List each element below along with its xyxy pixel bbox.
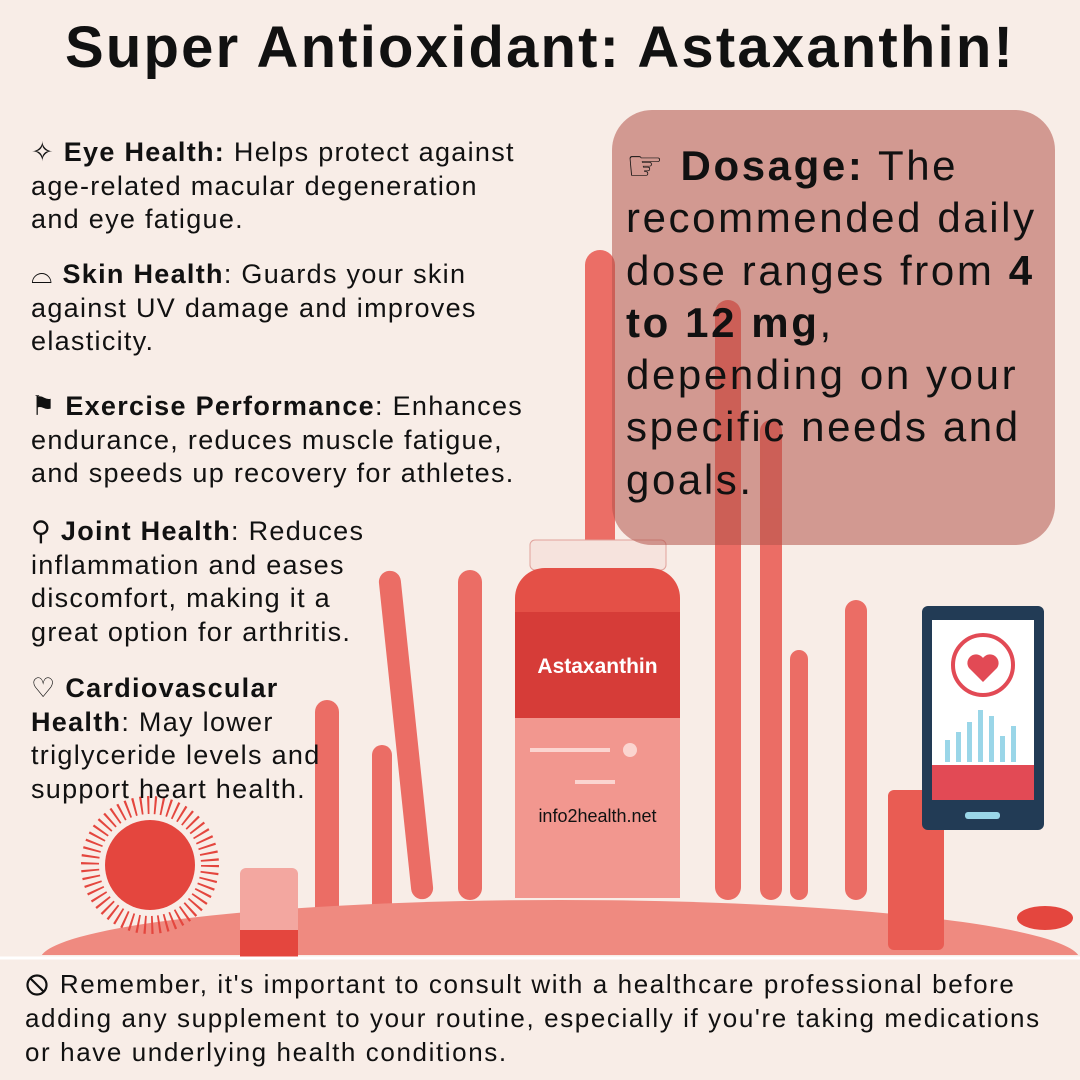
glass right (888, 790, 944, 950)
sea urchin (90, 805, 210, 925)
dosage callout: ☞ Dosage: The (626, 142, 958, 189)
item: joint: great option for arthritis. (31, 617, 351, 647)
phone (922, 606, 1044, 830)
item: cardio: ♡ Cardiovascular (31, 673, 279, 703)
item: cardio: triglyceride levels and (31, 740, 321, 770)
item: skin health: elasticity. (31, 326, 154, 356)
dosage callout: recommended daily (626, 194, 1037, 241)
item: eye health: and eye fatigue. (31, 204, 244, 234)
item: cardio (31, 673, 321, 804)
item: cardio: support heart health. (31, 774, 306, 804)
item: exercise: endurance, reduces muscle fatigue, (31, 425, 503, 455)
item: exercise: ⚑ Exercise Performance: Enhances (31, 391, 523, 421)
item: skin health: against UV damage and improves (31, 293, 477, 323)
item: exercise: and speeds up recovery for athletes. (31, 458, 515, 488)
footer note: or have underlying health conditions. (25, 1037, 508, 1067)
stalks (315, 250, 867, 920)
title: Super Antioxidant: Astaxanthin! (65, 15, 1015, 80)
dosage callout: to 12 mg, (626, 299, 834, 346)
ground (40, 900, 1080, 1020)
item: skin health: ⌓ Skin Health: Guards your skin (31, 259, 466, 289)
item: joint: ⚲ Joint Health: Reduces (31, 516, 364, 546)
bottle (515, 540, 680, 898)
small jar (240, 868, 298, 958)
item: eye health (31, 137, 515, 234)
footer note: adding any supplement to your routine, especially if you're taking medications (25, 1003, 1041, 1033)
item: skin health (31, 259, 477, 356)
dosage callout: specific needs and (626, 403, 1021, 450)
dosage callout: dose ranges from 4 (626, 247, 1035, 294)
item: joint: inflammation and eases (31, 550, 345, 580)
item: eye health: ✧ Eye Health: Helps protect against (31, 137, 515, 167)
mushrooms (1017, 906, 1073, 930)
watermark: info2health.net (538, 806, 657, 826)
item: joint (31, 516, 364, 647)
footer note: Remember, it's important to consult with a healthcare professional before (60, 969, 1015, 999)
item: exercise (31, 391, 523, 488)
item: cardio: Health: May lower (31, 707, 274, 737)
dosage callout (612, 110, 1055, 545)
dosage callout: depending on your (626, 351, 1018, 398)
item: eye health: age-related macular degeneration (31, 171, 478, 201)
item: joint: discomfort, making it a (31, 583, 331, 613)
footer note (25, 969, 1041, 1067)
bottle label text: Astaxanthin (537, 655, 658, 678)
dosage callout: goals. (626, 456, 754, 503)
